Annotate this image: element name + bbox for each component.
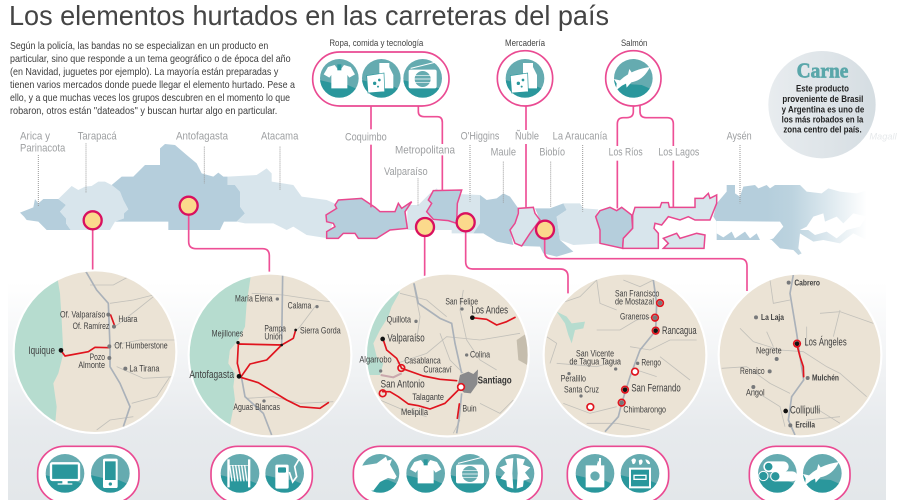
map: Biobío: La Laja [761, 312, 784, 322]
region labels: Parinacota [20, 143, 65, 155]
intro text block [10, 41, 295, 117]
region: Coquimbo highlighted [326, 198, 412, 238]
region: O'Higgins [452, 194, 480, 233]
map: Valparaíso y Santiago: Algarrobo [359, 355, 392, 365]
map: Tarapacá: Huara [118, 314, 137, 324]
intro text block: robaron, otros están "dateados" y buscan hurtar algo en particular. [10, 106, 277, 117]
map: Valparaíso y Santiago: San Felipe [445, 296, 478, 306]
callout: Mercadería: Mercadería [505, 38, 545, 48]
callout: Carne: los más robados en la [782, 115, 864, 125]
map: O'Higgins: Rengo [641, 358, 661, 368]
region labels: Biobío [539, 146, 565, 158]
region marker dots [84, 197, 554, 239]
map: Antofagasta: Unión [264, 331, 283, 341]
map: O'Higgins: Rancagua [662, 325, 697, 337]
region labels [20, 129, 898, 178]
region: Ñuble highlighted [510, 207, 540, 246]
label backgrounds interrupting connectors [343, 129, 388, 145]
region labels: Antofagasta [176, 130, 228, 142]
region labels: La Araucanía [553, 130, 607, 142]
map: Antofagasta: Mejillones [212, 328, 244, 338]
callout: Carne: zona centro del país. [783, 125, 862, 135]
intro text block: particular, sino que responde a un tema geográfico o de época del año [10, 54, 291, 65]
map: Valparaíso y Santiago: Curacaví [423, 365, 452, 375]
callout: Ropa, comida y tecnología: Ropa, comida y tecnología [329, 38, 423, 48]
map: Tarapacá: Of. Humberstone [114, 341, 168, 351]
map: Antofagasta: María Elena [235, 294, 273, 304]
region: Arica y Parinacota [20, 199, 71, 230]
callout: Salmón: Salmón [621, 38, 647, 48]
map: Antofagasta: Pampa [264, 324, 286, 334]
map: Valparaíso y Santiago: Valparaíso [387, 332, 425, 344]
map: Tarapacá: Of. Valparaíso [60, 309, 105, 319]
title: Los elementos hurtados en las carreteras del país [9, 0, 609, 31]
map: Biobío: Los Ángeles [804, 336, 847, 349]
map: Biobío: Angol [746, 388, 765, 398]
map: Valparaíso y Santiago: Casablanca [404, 355, 441, 365]
icons pill: cattle, clothes, radio, copper [353, 446, 542, 500]
map: Valparaíso y Santiago: Buin [462, 404, 477, 414]
map: O'Higgins: de Mostazal [615, 296, 654, 306]
map: Valparaíso y Santiago: San Antonio [381, 378, 425, 390]
region labels: Ñuble [515, 129, 539, 142]
callout: Carne: Este producto [796, 84, 849, 94]
map: Tarapacá: Pozo [90, 352, 105, 362]
map: Valparaíso y Santiago: Colina [470, 349, 490, 359]
region: Maule [473, 193, 518, 245]
map: O'Higgins: San Vicente [576, 349, 614, 359]
callout: Carne: Carne [797, 60, 848, 82]
map: Antofagasta: Calama [288, 301, 311, 311]
region labels: Metropolitana [395, 144, 455, 156]
region: La Araucanía [557, 203, 600, 245]
callout: Carne: y Argentina es uno de [782, 104, 864, 114]
callout: Mercadería [497, 38, 553, 106]
region: Antofagasta [112, 144, 245, 230]
region labels: Tarapacá [78, 130, 117, 142]
map: Biobío: Collipulli [790, 405, 820, 417]
intro text block: Según la policía, las bandas no se especializan en un producto en [10, 41, 269, 52]
map: O'Higgins: Peralillo [561, 374, 586, 384]
icons pill: monitor, phone [38, 446, 139, 500]
map: Biobío: Renaico [740, 366, 765, 376]
map: Valparaíso y Santiago: Santiago [478, 375, 512, 386]
map: Valparaíso y Santiago [359, 270, 533, 440]
map: Antofagasta [187, 270, 353, 440]
callout: Ropa, comida y tecnología [313, 38, 449, 106]
region: Biobío [522, 203, 573, 257]
region labels: Maule [491, 146, 516, 158]
icons pill: logs, salmon [749, 446, 850, 500]
region: Los Ríos highlighted [596, 207, 633, 248]
map: Tarapacá [10, 267, 180, 437]
map: O'Higgins: de Tagua Tagua [569, 356, 621, 366]
map: Biobío: Ercilla [795, 419, 815, 429]
map: Tarapacá: La Tirana [129, 364, 159, 374]
map: Biobío: Mulchén [812, 373, 839, 383]
map: O'Higgins: Chimbarongo [623, 404, 666, 414]
icons pill: cigarettes, food [567, 446, 669, 500]
map: Valparaíso y Santiago: Melipilla [401, 407, 428, 417]
region: Los Lagos highlighted [623, 193, 717, 248]
callout: Salmón [606, 38, 661, 106]
region labels: Atacama [261, 130, 298, 142]
strip map of Chile regions [20, 144, 880, 257]
icons pill: hose, fuel [211, 446, 312, 500]
region labels: Magall [869, 131, 898, 141]
intro text block: tienen varios mercados donde puede llegar el elemento hurtado. Pese a [10, 80, 295, 91]
region: Metropolitana highlighted [427, 190, 462, 223]
map: Tarapacá: Almonte [78, 360, 105, 370]
dotted region leaders [38, 143, 740, 212]
map: Valparaíso y Santiago: Los Andes [471, 304, 508, 316]
region: Los Lagos island [663, 233, 705, 248]
callout: Carne: proveniente de Brasil [782, 94, 863, 104]
map: O'Higgins: San Fernando [631, 382, 681, 394]
region labels: Los Lagos [658, 146, 699, 158]
map: Biobío: Negrete [756, 345, 782, 355]
map: O'Higgins: Graneros [620, 311, 649, 321]
intro text block: ello, y a que muchas veces los grupos descubren en el momento lo que [10, 93, 290, 104]
region: Atacama [228, 168, 338, 238]
region labels: O'Higgins [461, 130, 499, 142]
region labels: Coquimbo [345, 132, 387, 144]
intro text block: (en Navidad, juguetes por ejemplo). La mayoría están preparadas y [10, 67, 279, 78]
map: Valparaíso y Santiago: Talagante [412, 392, 444, 402]
map: Antofagasta: Sierra Gorda [300, 325, 341, 335]
bottom gradient panel [8, 263, 886, 500]
region: Aysén [713, 185, 880, 255]
region labels: Valparaíso [384, 166, 428, 178]
map: Tarapacá: Iquique [28, 345, 55, 357]
map: Antofagasta: Antofagasta [189, 369, 235, 381]
region: Tarapacá [58, 182, 128, 230]
region labels: Los Ríos [609, 146, 643, 158]
map: Biobío [717, 270, 887, 440]
map: Biobío: Cabrero [794, 277, 820, 287]
map: Tarapacá: Of. Ramírez [73, 321, 110, 331]
Aysén white fjords [717, 213, 867, 243]
region labels: Arica y [20, 130, 51, 142]
callout: Carne [768, 51, 876, 158]
region labels: Aysén [727, 130, 752, 142]
map: O'Higgins: San Francisco [615, 289, 659, 299]
pink connector lines [93, 106, 747, 293]
map: Valparaíso y Santiago: Quillota [387, 314, 411, 324]
map: O'Higgins: Santa Cruz [564, 385, 599, 395]
map: O'Higgins [540, 270, 710, 440]
region: Valparaíso [407, 188, 457, 230]
map: Antofagasta: Aguas Blancas [233, 402, 280, 412]
